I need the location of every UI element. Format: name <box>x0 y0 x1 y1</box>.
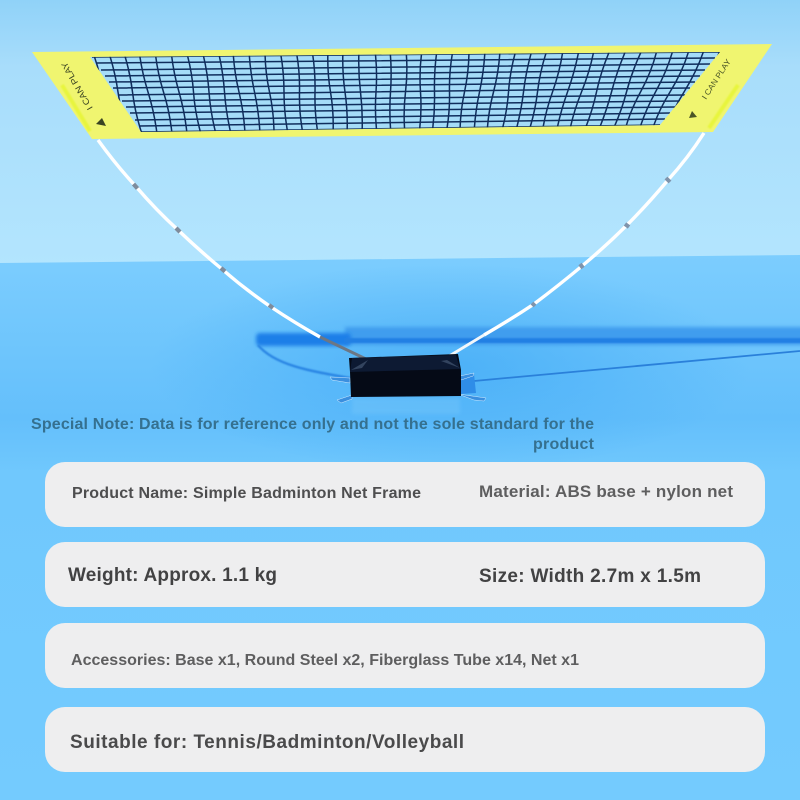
card: weight and size: Size: Width 2.7m x 1.5m <box>479 566 701 587</box>
glow under base <box>352 398 460 414</box>
card: product name and material: Material: ABS base + nylon net <box>479 482 733 501</box>
card: suitable for <box>45 707 765 772</box>
yellow highlight strips <box>62 85 738 131</box>
net shadow on floor <box>256 327 800 394</box>
base anchor plates <box>330 373 486 403</box>
left pole <box>98 140 368 360</box>
brand mark left: I CAN PLAY <box>59 60 95 112</box>
right pole <box>441 133 704 361</box>
card: accessories <box>45 623 765 688</box>
floor glow <box>150 260 750 470</box>
background: sky <box>0 0 800 266</box>
brand mark right: I CAN PLAY <box>700 57 733 101</box>
card: weight and size <box>45 542 765 607</box>
card: suitable for: Suitable for: Tennis/Badminton/Volleyball <box>70 732 464 753</box>
brand mark right <box>689 57 733 118</box>
card: product name and material: Product Name: Simple Badminton Net Frame <box>72 485 421 502</box>
brand mark left <box>59 60 106 126</box>
net mesh <box>92 50 720 134</box>
special note <box>31 416 595 453</box>
card: accessories: Accessories: Base x1, Round Steel x2, Fiberglass Tube x14, Net x1 <box>71 652 579 669</box>
net frame: yellow band <box>32 44 772 139</box>
special note: Special Note: Data is for reference only and not the sole standard for the <box>31 416 594 433</box>
card: product name and material <box>45 462 765 527</box>
card: weight and size: Weight: Approx. 1.1 kg <box>68 565 277 586</box>
net opening <box>90 52 720 132</box>
special note: product <box>533 436 595 453</box>
base block <box>349 354 461 397</box>
background: floor <box>0 255 800 800</box>
